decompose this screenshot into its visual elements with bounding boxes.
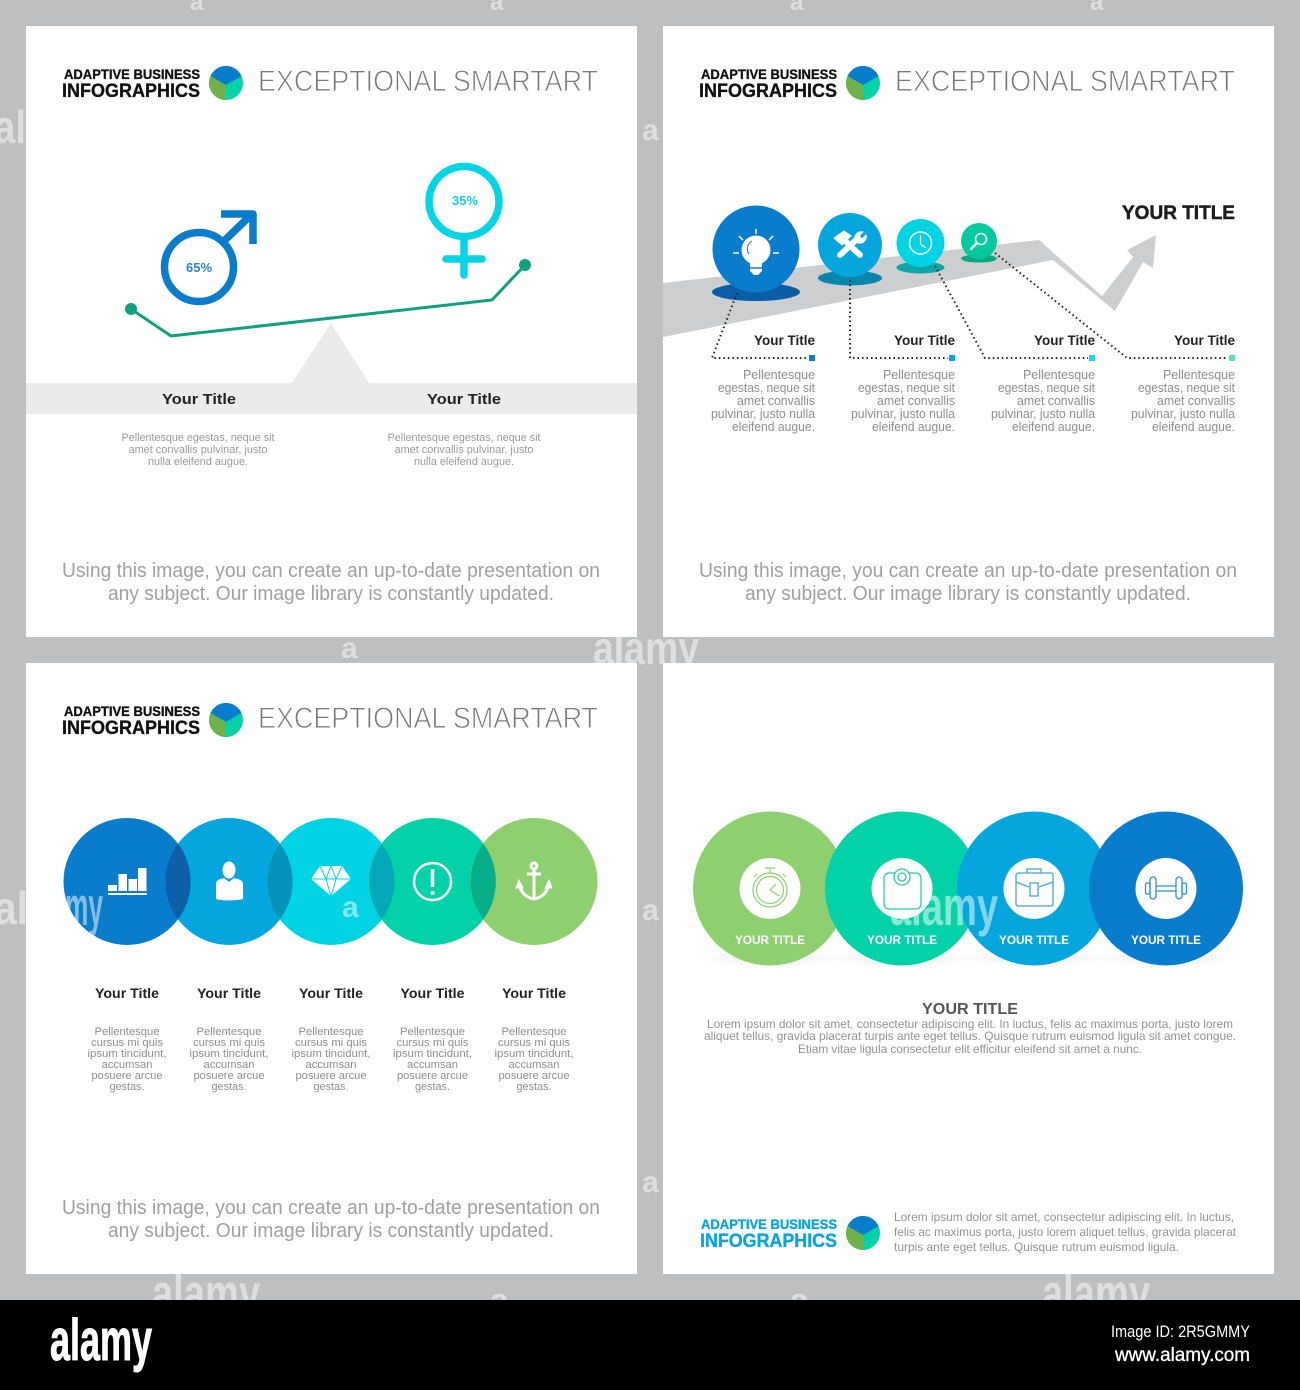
column 3: eleifend augue. — [1012, 420, 1095, 434]
left body text — [122, 432, 274, 468]
logo side text — [894, 1210, 1237, 1254]
logo: adaptive business infographics — [699, 66, 880, 102]
column 1 — [711, 333, 815, 434]
panel: four circles — [663, 663, 1274, 1274]
logo: coloured: ADAPTIVE BUSINESS — [701, 1216, 837, 1232]
heading: EXCEPTIONAL SMARTART — [258, 702, 598, 735]
column 5 body — [494, 1026, 574, 1093]
step 2 tools — [818, 213, 882, 286]
step 4 magnifier — [961, 223, 997, 262]
circle labels: YOUR TITLE — [1131, 933, 1201, 947]
column titles — [95, 985, 566, 1001]
circle 4 dumbbell — [1089, 812, 1243, 966]
column 1 body: Pellentesque — [94, 1026, 160, 1038]
column 2 body: accumsan — [204, 1059, 254, 1071]
column 2 body: ipsum tincidunt, — [190, 1048, 268, 1060]
icon: hammer and wrench — [834, 231, 866, 255]
column 4 body: ipsum tincidunt, — [393, 1048, 472, 1060]
right body text: Pellentesque egestas, neque sit — [388, 432, 540, 444]
column 3: egestas, neque sit — [998, 381, 1095, 395]
footer text — [62, 560, 600, 605]
column 4 body: cursus mi quis — [396, 1037, 469, 1049]
panel: gender balance — [26, 26, 637, 637]
section body: Etiam vitae ligula consectetur elit efficitur eleifend sit amet a nunc. — [798, 1042, 1142, 1056]
column 1 body: gestas. — [110, 1081, 144, 1093]
column 2: pulvinar, justo nulla — [851, 407, 955, 421]
column 1: eleifend augue. — [732, 420, 815, 434]
column 3 body: gestas. — [314, 1081, 348, 1093]
column 2 — [851, 333, 955, 434]
column 4: amet convallis — [1157, 394, 1235, 408]
column 5 body: Pellentesque — [502, 1026, 566, 1038]
column 2 body — [190, 1026, 268, 1093]
circle labels: YOUR TITLE — [999, 933, 1069, 947]
column 2: egestas, neque sit — [858, 381, 955, 395]
panel: overlapping circles: a — [342, 891, 359, 924]
circle labels: YOUR TITLE — [735, 933, 805, 947]
icon: anchor — [516, 863, 552, 899]
step 1 bulb — [712, 206, 800, 301]
column 5 body: ipsum tincidunt, — [494, 1048, 574, 1060]
icon: male symbol — [164, 214, 253, 302]
column 1: amet convallis — [737, 394, 815, 408]
column 1 body: cursus mi quis — [91, 1037, 164, 1049]
circle labels — [735, 933, 1201, 947]
logo side text: felis ac maximus porta, justo lorem aliquet tellus, gravida placerat — [894, 1225, 1237, 1239]
logo: adaptive business infographics: INFOGRAPHICS — [62, 81, 200, 102]
image id: Image ID: 2R5GMMY — [1111, 1322, 1250, 1341]
right body text: nulla eleifend augue. — [414, 456, 514, 468]
footer text: Using this image, you can create an up-to-date presentation on — [62, 1197, 600, 1219]
circle 2 scale — [825, 812, 979, 966]
circle 3 briefcase — [957, 812, 1111, 966]
logo: coloured — [700, 1216, 880, 1252]
column 5 body: gestas. — [516, 1081, 552, 1093]
text: a — [642, 114, 659, 147]
column 2 body: gestas. — [212, 1081, 246, 1093]
left title: Your Title — [162, 391, 236, 408]
column 1: Your Title — [754, 333, 815, 348]
seesaw line — [125, 259, 531, 336]
column 4: pulvinar, justo nulla — [1131, 407, 1235, 421]
dotted leader lines — [712, 253, 1228, 358]
footer text: any subject. Our image library is constantly updated. — [108, 1220, 554, 1242]
circle 1 stopwatch — [693, 812, 847, 966]
right body text — [388, 432, 540, 468]
column 4 — [1131, 333, 1235, 434]
text: a — [490, 1282, 510, 1320]
column 4 body: Pellentesque — [400, 1026, 465, 1038]
icon: bar chart — [108, 868, 147, 895]
column 3 body: accumsan — [306, 1059, 356, 1071]
column 4: eleifend augue. — [1152, 420, 1235, 434]
column 3: Pellentesque — [1023, 368, 1095, 382]
column 3 — [991, 333, 1095, 434]
right body text: amet convallis pulvinar, justo — [394, 444, 534, 456]
column 1 body: ipsum tincidunt, — [88, 1048, 166, 1060]
logo: adaptive business infographics: ADAPTIVE BUSINESS — [701, 66, 837, 82]
text: alamy — [152, 1262, 260, 1324]
column 1: pulvinar, justo nulla — [711, 407, 815, 421]
column 4: Your Title — [1174, 333, 1235, 348]
column 1 body: accumsan — [102, 1059, 152, 1071]
icon: bathroom scale — [884, 869, 921, 909]
footer bar — [0, 1300, 1300, 1390]
footer text: any subject. Our image library is constantly updated. — [745, 583, 1191, 605]
column 3 body: ipsum tincidunt, — [292, 1048, 370, 1060]
heading: EXCEPTIONAL SMARTART — [895, 65, 1235, 98]
panel: overlapping circles: my — [65, 875, 103, 937]
column 4 body: posuere arcue — [397, 1070, 468, 1082]
column 3: Your Title — [1034, 333, 1095, 348]
column 5 body: cursus mi quis — [498, 1037, 571, 1049]
text: alamy — [593, 622, 699, 674]
fulcrum triangle — [292, 323, 369, 383]
column 5 body: accumsan — [508, 1059, 560, 1071]
column 4: egestas, neque sit — [1138, 381, 1235, 395]
column 4 body: accumsan — [407, 1059, 458, 1071]
circle shadows — [695, 949, 1241, 967]
footer text: Using this image, you can create an up-to-date presentation on — [62, 560, 600, 582]
icon: dumbbell — [1146, 877, 1186, 899]
column 3 body — [292, 1026, 370, 1093]
column 1: egestas, neque sit — [718, 381, 815, 395]
icon: briefcase — [1016, 869, 1053, 906]
section body — [704, 1017, 1236, 1056]
left body text: nulla eleifend augue. — [148, 456, 248, 468]
text: a — [642, 1166, 659, 1199]
column 2: eleifend augue. — [872, 420, 955, 434]
chart title: YOUR TITLE — [1122, 203, 1235, 224]
icon: diamond — [311, 866, 351, 896]
logo side text: Lorem ipsum dolor sit amet, consectetur adipiscing elit. In luctus, — [894, 1210, 1234, 1224]
footer text: Using this image, you can create an up-to-date presentation on — [699, 560, 1237, 582]
website: www.alamy.com — [1114, 1345, 1250, 1366]
column 2 body: cursus mi quis — [193, 1037, 266, 1049]
column titles: Your Title — [502, 985, 566, 1001]
column 2 body: posuere arcue — [194, 1070, 264, 1082]
footer text: any subject. Our image library is constantly updated. — [108, 583, 554, 605]
column 3: pulvinar, justo nulla — [991, 407, 1095, 421]
column 1 body — [88, 1026, 166, 1093]
column 4: Pellentesque — [1163, 368, 1235, 382]
column 3 body: Pellentesque — [298, 1026, 364, 1038]
column titles: Your Title — [95, 985, 159, 1001]
column 4 body — [393, 1026, 472, 1093]
circle chain — [64, 818, 598, 945]
footer text — [62, 1197, 600, 1242]
logo: adaptive business infographics — [62, 66, 243, 102]
section body: aliquet tellus, gravida placerat turpis ante eget tellus. Quisque rutrum euismod ligula sit amet congue. — [704, 1029, 1236, 1043]
column 2: Pellentesque — [883, 368, 955, 382]
icon: light bulb — [733, 229, 779, 275]
column 3 body: cursus mi quis — [295, 1037, 368, 1049]
column 4 body: gestas. — [415, 1081, 450, 1093]
text: alamy — [1042, 1262, 1150, 1324]
column 3 body: posuere arcue — [296, 1070, 366, 1082]
step 3 clock — [896, 219, 944, 274]
column 1: Pellentesque — [743, 368, 815, 382]
text: a — [790, 1282, 810, 1320]
icon: person — [216, 862, 243, 900]
column titles: Your Title — [400, 985, 465, 1001]
panel: overlapping circles — [26, 663, 637, 1274]
icon: magnifier — [971, 234, 986, 249]
column 2 body: Pellentesque — [196, 1026, 262, 1038]
left body text: Pellentesque egestas, neque sit — [122, 432, 274, 444]
section body: Lorem ipsum dolor sit amet, consectetur adipiscing elit. In luctus, felis ac maximus porta, justo lorem — [707, 1017, 1233, 1031]
column titles: Your Title — [197, 985, 261, 1001]
icon: clock — [910, 232, 932, 254]
grey band — [26, 383, 637, 414]
column titles: Your Title — [299, 985, 363, 1001]
column 3: amet convallis — [1017, 394, 1095, 408]
text: a — [642, 894, 659, 927]
column 2: Your Title — [894, 333, 955, 348]
circle labels: YOUR TITLE — [867, 933, 937, 947]
label: 65 percent: 65% — [186, 260, 212, 275]
logo: adaptive business infographics: ADAPTIVE BUSINESS — [64, 66, 200, 82]
icon: female symbol — [429, 166, 499, 275]
logo: coloured: INFOGRAPHICS — [700, 1231, 837, 1252]
right title: Your Title — [427, 391, 501, 408]
icon: exclamation — [414, 863, 451, 900]
brand wordmark: alamy — [50, 1308, 152, 1373]
logo: adaptive business infographics: INFOGRAPHICS — [62, 718, 200, 739]
section title: YOUR TITLE — [922, 1001, 1018, 1018]
footer text — [699, 560, 1237, 605]
column 2: amet convallis — [877, 394, 955, 408]
logo: adaptive business infographics — [62, 703, 243, 739]
watermark on circles: alamy — [890, 875, 998, 937]
logo: adaptive business infographics: ADAPTIVE BUSINESS — [64, 703, 200, 719]
grey arrow — [663, 235, 1156, 337]
column 5 body: posuere arcue — [498, 1070, 570, 1082]
label: 35 percent: 35% — [452, 193, 478, 208]
logo side text: turpis ante eget tellus. Quisque rutrum euismod ligula. — [894, 1240, 1179, 1254]
panel: growth timeline — [663, 26, 1274, 637]
text: a — [341, 632, 358, 665]
icon: stopwatch — [753, 868, 787, 907]
left body text: amet convallis pulvinar, justo — [128, 444, 268, 456]
logo: adaptive business infographics: INFOGRAPHICS — [699, 81, 837, 102]
heading: EXCEPTIONAL SMARTART — [258, 65, 598, 98]
column 1 body: posuere arcue — [92, 1070, 162, 1082]
